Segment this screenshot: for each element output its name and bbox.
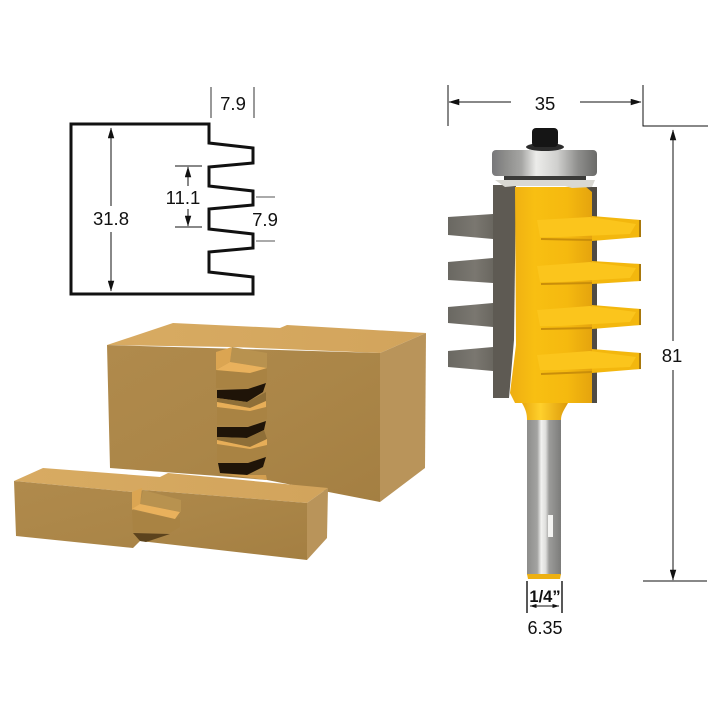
piece top face (14, 468, 328, 503)
bolt (526, 128, 564, 151)
dimension: 31.8 height: 31.8 (93, 208, 129, 229)
block tongues and gaps (216, 347, 267, 480)
piece tenon (132, 504, 180, 533)
carbide fins left (448, 214, 493, 371)
overall dimensions of bit (448, 85, 708, 581)
washer (495, 180, 595, 188)
carbide body (493, 185, 516, 398)
shank dimension (527, 581, 563, 638)
router bit (448, 128, 641, 579)
dimension: 7.9 tooth (252, 197, 278, 241)
piece front face (14, 481, 307, 560)
yellow cutter body (510, 187, 592, 403)
large wood block (107, 323, 426, 502)
piece shadow (133, 533, 170, 542)
wood joint illustration (14, 323, 426, 560)
shank dimension: 1/4” (529, 588, 561, 606)
dimension: 81 length (643, 85, 708, 581)
block side face (380, 333, 426, 502)
profile outline (71, 124, 253, 294)
dimension: 11.1 pitch (166, 166, 202, 227)
dimension: 7.9 top: 7.9 (220, 93, 246, 114)
dimension: 81 length: 81 (662, 345, 682, 366)
piece side face (307, 488, 328, 560)
dimension: 11.1 pitch: 11.1 (166, 187, 200, 208)
piece recess (140, 490, 181, 512)
joint profile diagram (71, 87, 278, 294)
block top face (107, 323, 426, 353)
carbide strip right (586, 187, 597, 403)
dimension: 35 width: 35 (535, 93, 555, 114)
bearing (492, 150, 597, 180)
piece notch wall (132, 488, 142, 510)
small wood piece (14, 468, 328, 560)
shank (527, 415, 561, 579)
dimension: 7.9 tooth: 7.9 (252, 209, 278, 230)
block front face (107, 345, 380, 502)
yellow fins right (537, 216, 641, 374)
neck (522, 403, 568, 420)
dimension: 7.9 top (211, 87, 254, 118)
shank dimension: 6.35 (527, 618, 563, 638)
